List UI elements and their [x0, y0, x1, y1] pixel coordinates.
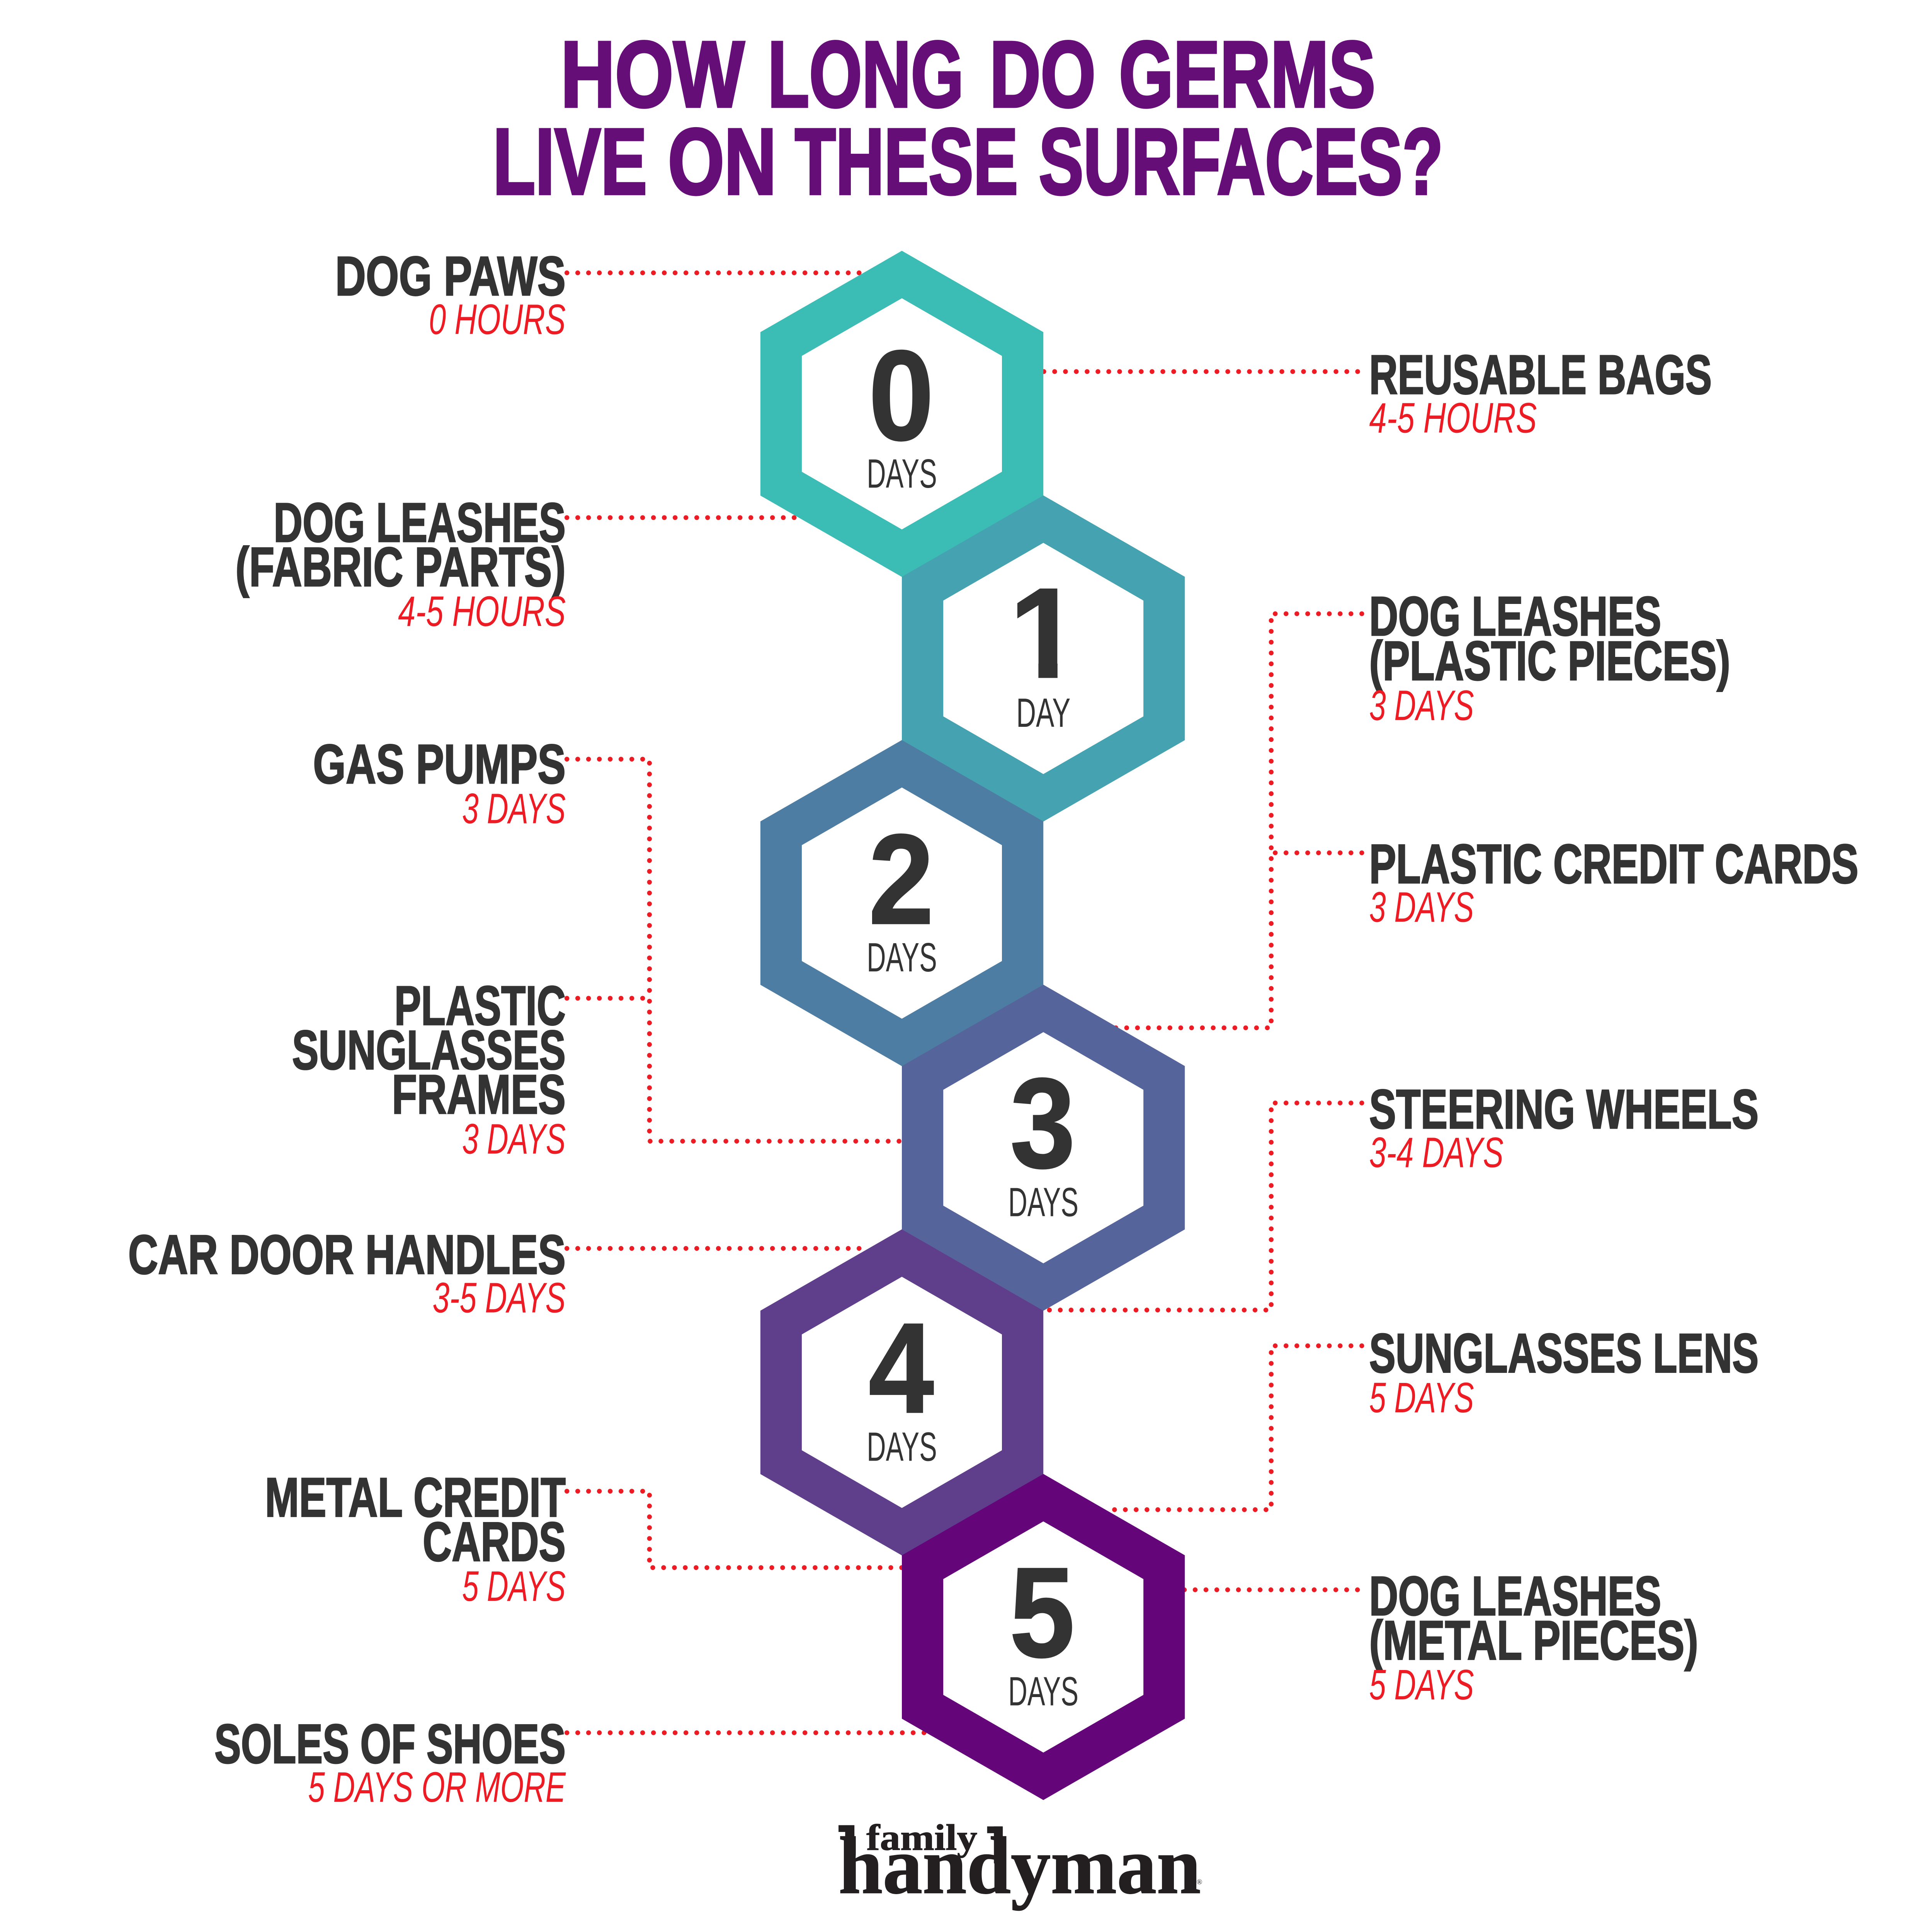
hexagon: 1 day: 1: [1009, 562, 1080, 705]
label: steering wheels: STEERING WHEELS: [1369, 1078, 1759, 1140]
label: gas pumps: GAS PUMPS: [313, 733, 566, 795]
connector: reusable bags: [1044, 371, 1362, 372]
hexagon: 0 days: [760, 251, 1043, 577]
label: plastic sunglasses frames: PLASTIC: [395, 975, 566, 1037]
label: car door handles: [128, 1224, 566, 1322]
label: dog leashes fabric parts: (FABRIC PARTS): [235, 536, 566, 598]
connector: dog leashes metal: [1184, 1589, 1362, 1590]
label: plastic sunglasses frames: SUNGLASSES: [292, 1019, 566, 1081]
label: metal credit cards: CARDS: [423, 1511, 566, 1573]
hexagon: 2 days: DAYS: [867, 934, 937, 980]
hexagon: 0 days: DAYS: [867, 451, 937, 497]
hexagon: 5 days: [902, 1474, 1185, 1800]
connector: steering wheels: [1044, 1103, 1362, 1310]
label: gas pumps: [313, 733, 566, 833]
label: steering wheels: [1369, 1078, 1759, 1176]
label: metal credit cards: [265, 1467, 566, 1610]
title: LIVE: [493, 110, 647, 214]
label: dog leashes plastic pieces: DOG LEASHES: [1369, 585, 1661, 647]
hexagon: 3 days: 3: [1010, 1052, 1075, 1195]
hexagon: 3 days: [902, 985, 1185, 1311]
label: metal credit cards: METAL CREDIT: [265, 1467, 566, 1529]
hexagon: 5 days: DAYS: [1008, 1668, 1078, 1714]
hexagon: 0 days: 0: [869, 324, 934, 467]
label: dog leashes plastic pieces: [1369, 585, 1730, 730]
label: plastic sunglasses frames: FRAMES: [392, 1064, 566, 1126]
label: dog leashes metal pieces: DOG LEASHES: [1369, 1565, 1661, 1627]
title: GERMS: [1119, 22, 1375, 127]
label: dog leashes plastic pieces: 3 DAYS: [1369, 682, 1474, 730]
label: steering wheels: 3-4 DAYS: [1369, 1129, 1503, 1176]
label: dog paws: [335, 245, 566, 343]
connector: car door handles: [567, 1248, 863, 1249]
connector: soles of shoes: [567, 1732, 927, 1733]
label: plastic sunglasses frames: [292, 975, 566, 1163]
hexagon: 3 days: DAYS: [1008, 1179, 1078, 1225]
label: reusable bags: 4-5 HOURS: [1369, 394, 1537, 442]
title: ON: [668, 110, 776, 214]
label: soles of shoes: SOLES OF SHOES: [214, 1713, 566, 1775]
label: dog leashes fabric parts: DOG LEASHES: [274, 492, 566, 554]
label: reusable bags: REUSABLE BAGS: [1369, 344, 1712, 406]
logo: family handyman: handyman: [838, 1820, 1201, 1911]
connector: dog leashes fabric: [567, 517, 799, 519]
label: plastic credit cards: [1369, 833, 1859, 931]
label: soles of shoes: 5 DAYS OR MORE: [308, 1764, 566, 1811]
label: dog leashes metal pieces: 5 DAYS: [1369, 1661, 1474, 1709]
label: reusable bags: [1369, 344, 1712, 442]
connector: sunglasses lens: [1107, 1346, 1362, 1510]
logo: family handyman: ®: [1197, 1878, 1202, 1886]
title: LONG: [768, 22, 964, 127]
title: SURFACES?: [1039, 110, 1443, 214]
label: dog leashes metal pieces: (METAL PIECES): [1369, 1610, 1698, 1672]
label: sunglasses lens: SUNGLASSES LENS: [1369, 1322, 1759, 1384]
hexagon: 1 day: [902, 495, 1185, 821]
hexagon: 4 days: [760, 1229, 1043, 1555]
title: HOW: [561, 22, 745, 127]
label: metal credit cards: 5 DAYS: [462, 1563, 566, 1610]
label: dog leashes plastic pieces: (PLASTIC PIECES): [1369, 630, 1730, 692]
label: sunglasses lens: 5 DAYS: [1369, 1374, 1474, 1422]
title: [493, 22, 1443, 214]
label: dog paws: 0 HOURS: [429, 296, 566, 343]
label: dog paws: DOG PAWS: [335, 245, 566, 307]
connector: dog paws: [567, 272, 863, 274]
hexagon: 4 days: 4: [869, 1297, 935, 1440]
connector: dog leashes plastic and plastic credit cards: [1115, 614, 1362, 1028]
title: DO: [990, 22, 1095, 127]
connector: gas pumps and plastic sunglasses frames: [567, 759, 902, 1141]
label: plastic sunglasses frames: 3 DAYS: [462, 1115, 566, 1163]
hexagon: 4 days: DAYS: [867, 1423, 937, 1469]
label: sunglasses lens: [1369, 1322, 1759, 1422]
connector: metal credit cards: [567, 1491, 902, 1568]
hexagon: 1 day: DAY: [1016, 690, 1070, 736]
label: car door handles: 3-5 DAYS: [432, 1274, 566, 1322]
label: dog leashes fabric parts: [235, 492, 566, 635]
label: gas pumps: 3 DAYS: [462, 785, 566, 833]
title: THESE: [795, 110, 1018, 214]
label: soles of shoes: [214, 1713, 566, 1811]
label: car door handles: CAR DOOR HANDLES: [128, 1224, 566, 1286]
label: plastic credit cards: 3 DAYS: [1369, 884, 1474, 931]
label: dog leashes metal pieces: [1369, 1565, 1698, 1709]
hexagon: 2 days: 2: [869, 808, 934, 951]
hexagon: 2 days: [760, 740, 1043, 1066]
label: dog leashes fabric parts: 4-5 HOURS: [398, 588, 566, 635]
hexagon: 5 days: 5: [1009, 1541, 1075, 1684]
logo: family handyman: family: [866, 1817, 977, 1858]
